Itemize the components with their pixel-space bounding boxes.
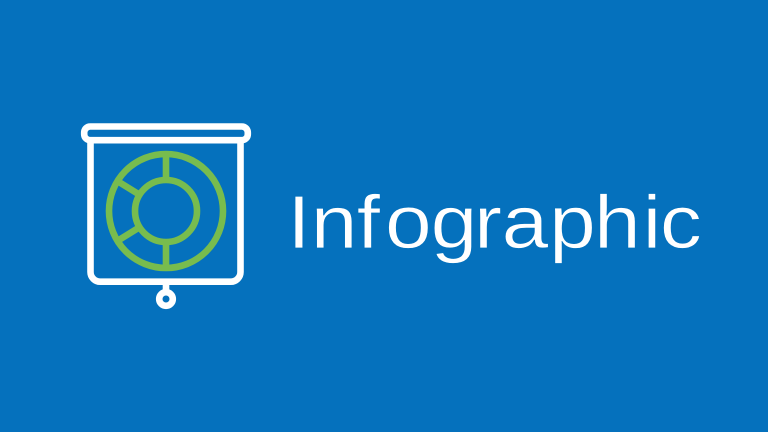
projection screen [90, 140, 240, 282]
icon: projector screen with donut chart [84, 126, 248, 306]
screen roller bar [84, 126, 248, 140]
donut chart [109, 154, 223, 268]
pull cord knob [159, 284, 173, 306]
title: Infographic [287, 180, 702, 264]
